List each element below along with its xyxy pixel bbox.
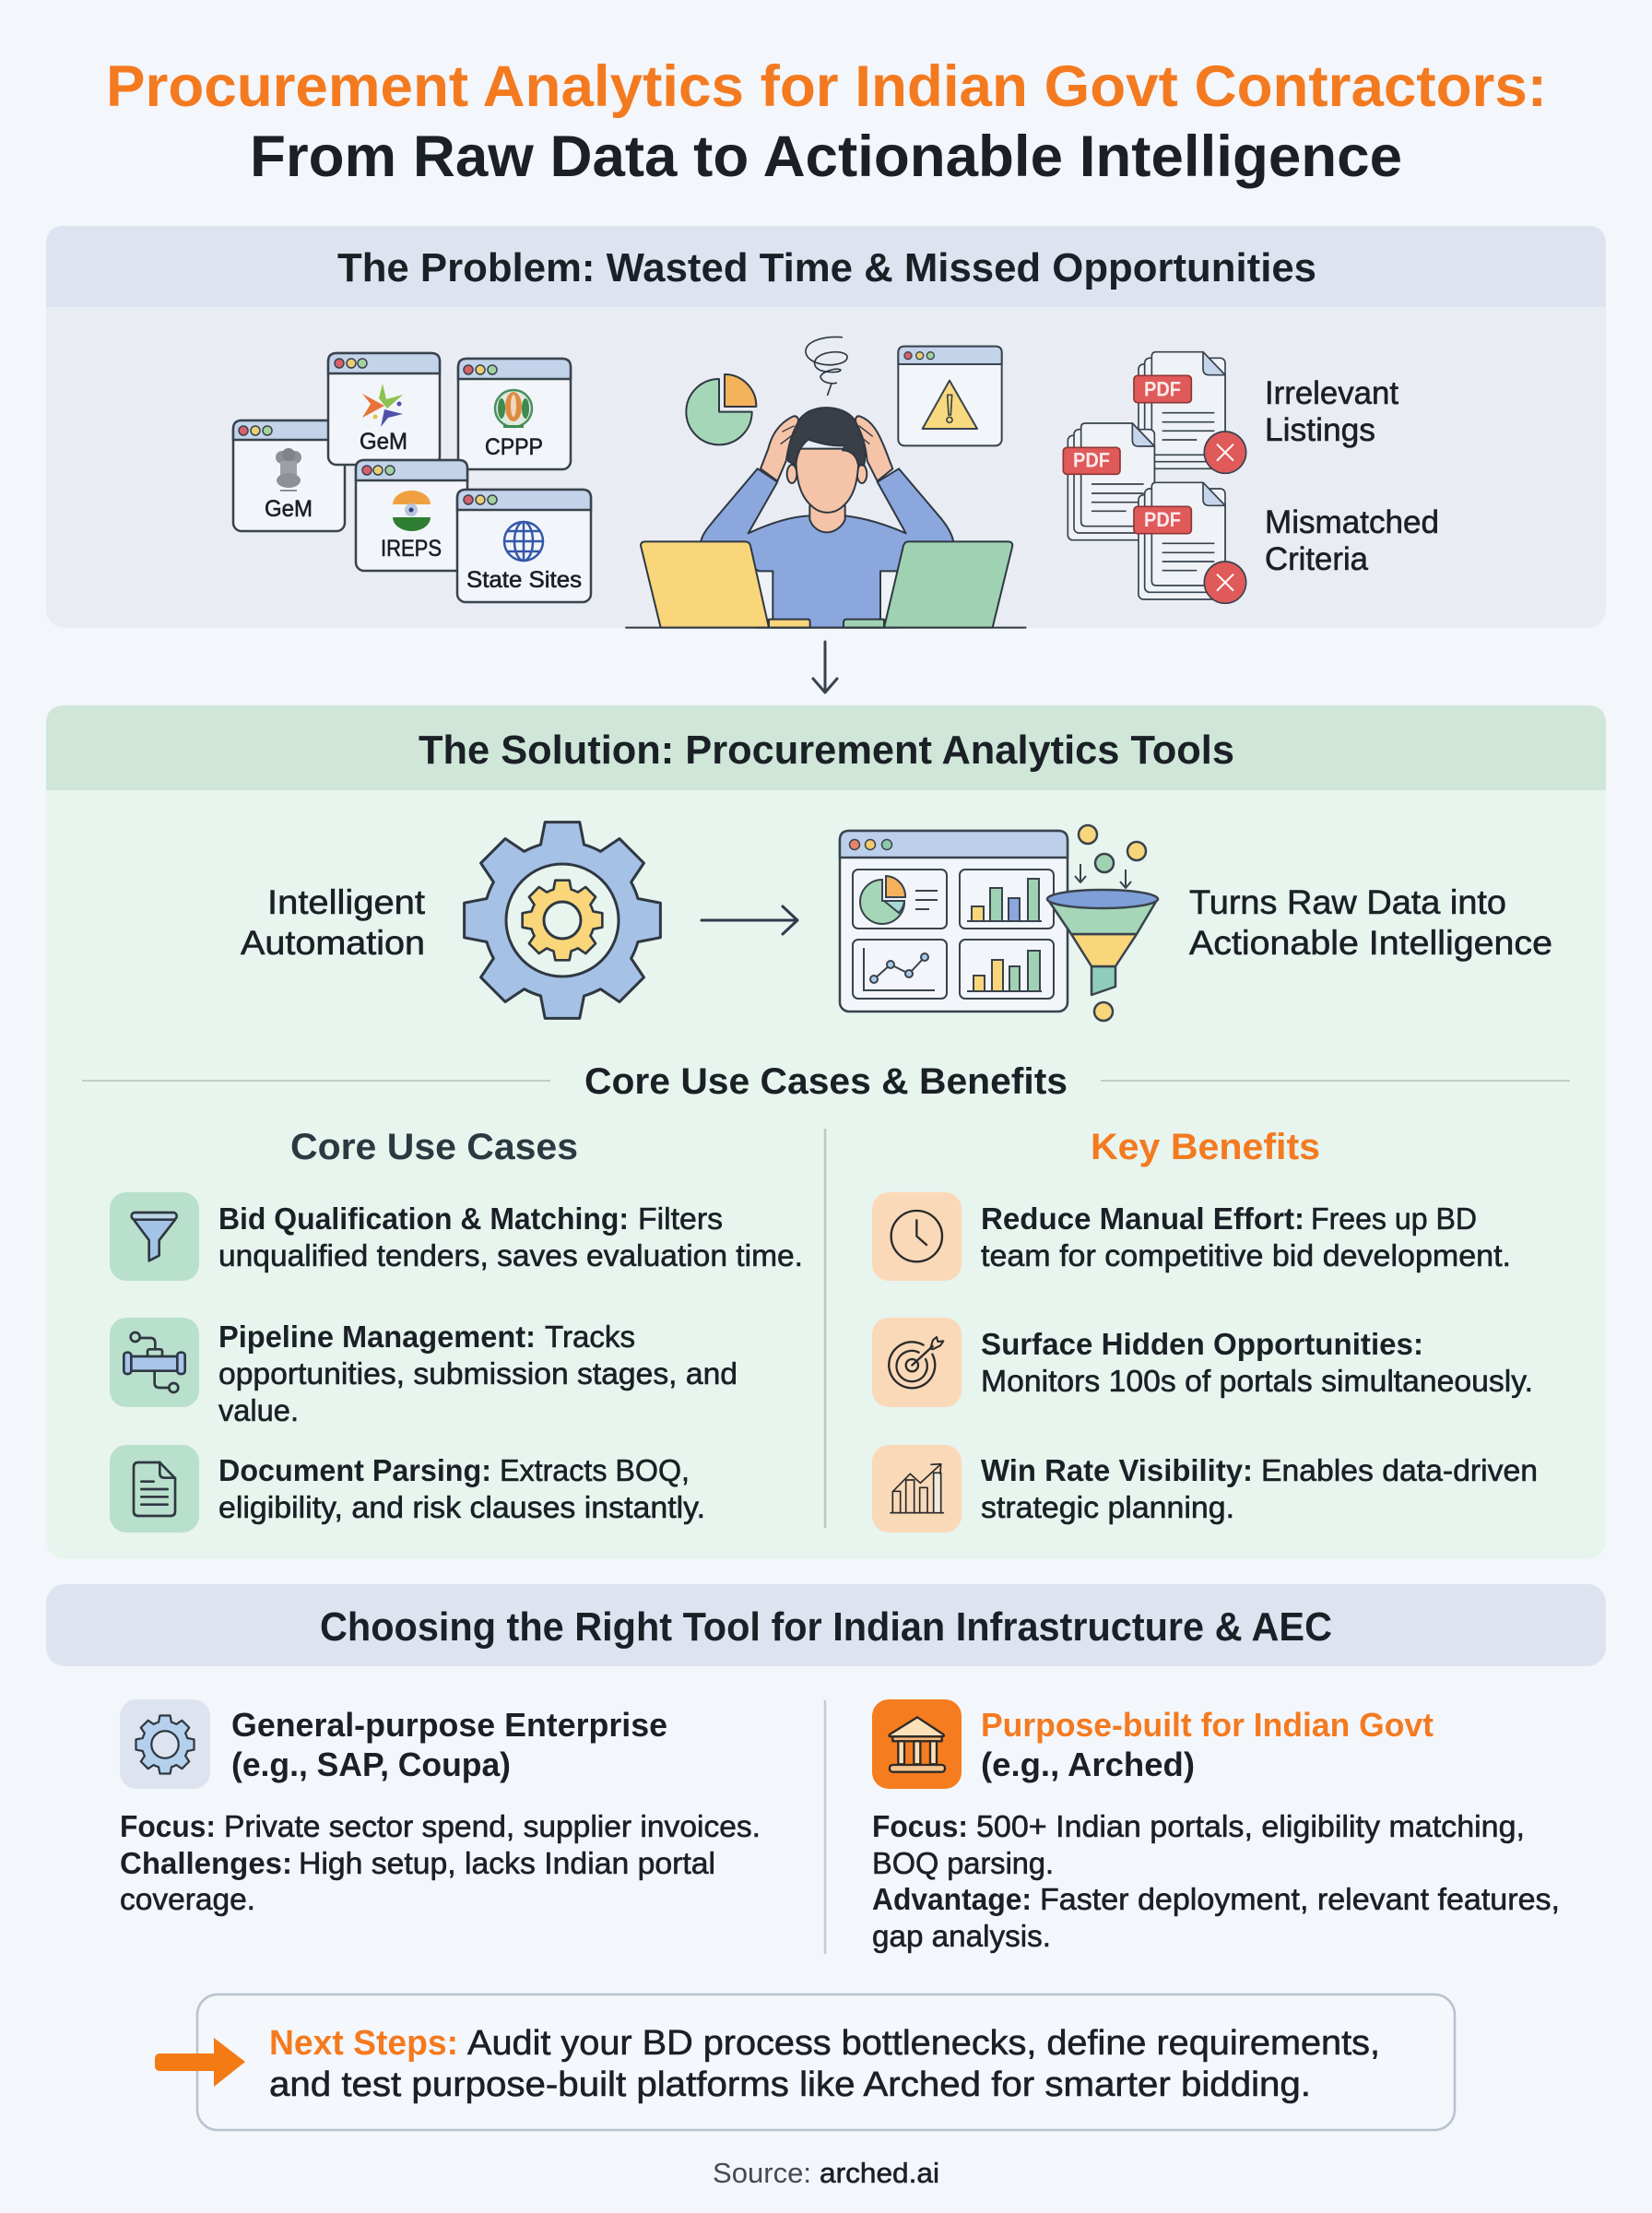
- benefit: surface hidden opportunities: Monitors 100s of portals simultaneously.: [981, 1364, 1533, 1398]
- callout: next steps: Next Steps:: [269, 2024, 458, 2063]
- icon: clock: [891, 1211, 942, 1261]
- label: mismatched criteria: Criteria: [1265, 541, 1369, 577]
- label: irrelevant listings: Irrelevant: [1265, 375, 1398, 411]
- use case: bid qualification: [110, 1192, 803, 1281]
- callout: next steps: [155, 1994, 1455, 2130]
- use case: document parsing: Document Parsing:: [218, 1453, 491, 1487]
- icon: growth chart: [891, 1464, 943, 1513]
- use case: pipeline management: Tracks: [545, 1320, 635, 1354]
- icon: pie chart: [686, 374, 756, 444]
- comparison: purpose-built: [872, 1699, 1560, 1953]
- use case: pipeline management: value.: [218, 1393, 299, 1427]
- dashboard tile: line chart: [853, 940, 947, 999]
- benefit: reduce manual effort: team for competitive bid development.: [981, 1238, 1511, 1272]
- callout: next steps: and test purpose-built platforms like Arched for smarter bidding.: [269, 2065, 1311, 2104]
- arrow: automation to dashboard: [702, 906, 797, 934]
- icon: automation gears: [465, 822, 660, 1018]
- window: State Sites: State Sites: [466, 567, 582, 593]
- comparison: purpose-built: gap analysis.: [872, 1919, 1051, 1953]
- desk line: [625, 625, 1026, 631]
- window: IREPS: [356, 460, 467, 571]
- window: GeM star: GeM: [360, 429, 407, 455]
- comparison: general-purpose enterprise: [120, 1699, 761, 1916]
- dashboard tile: bar chart: [960, 870, 1054, 929]
- use case: bid qualification: unqualified tenders, saves evaluation time.: [218, 1238, 803, 1272]
- icon: warning window: [898, 347, 1002, 445]
- comparison: general-purpose enterprise: Challenges:: [120, 1846, 292, 1880]
- comparison: general-purpose enterprise: Private sector spend, supplier invoices.: [224, 1809, 761, 1843]
- title: Procurement Analytics for Indian Govt Contractors:: [106, 54, 1547, 119]
- comparison: purpose-built: 500+ Indian portals, eligibility matching,: [976, 1809, 1525, 1843]
- use case: pipeline management: opportunities, submission stages, and: [218, 1356, 738, 1391]
- window: GeM emblem: [233, 420, 345, 531]
- source line: arched.ai: [820, 2157, 939, 2189]
- comparison: general-purpose enterprise: coverage.: [120, 1882, 255, 1916]
- subheading: core use cases and benefits: Core Use Cases & Benefits: [584, 1061, 1068, 1102]
- comparison: purpose-built: BOQ parsing.: [872, 1846, 1054, 1880]
- icon: funnel: [132, 1213, 177, 1260]
- use case: document parsing: eligibility, and risk clauses instantly.: [218, 1490, 705, 1524]
- label: intelligent automation: Automation: [241, 924, 425, 962]
- label: irrelevant listings: [1265, 375, 1398, 448]
- benefit: win rate visibility: [872, 1445, 1538, 1533]
- problem header bar: [46, 226, 1606, 307]
- label: turns raw data: [1189, 883, 1552, 962]
- use case: bid qualification: Bid Qualification & Matching:: [218, 1201, 629, 1236]
- comparison: general-purpose enterprise: High setup, lacks Indian portal: [299, 1846, 715, 1880]
- arrow: problem to solution: [813, 642, 837, 692]
- panel: the problem: [46, 226, 1606, 628]
- person: [701, 408, 953, 628]
- label: intelligent automation: [241, 883, 426, 962]
- stack: middle PDF: [1063, 423, 1154, 540]
- comparison: general-purpose enterprise: General-purpose Enterprise: [231, 1706, 667, 1744]
- title: From Raw Data to Actionable Intelligence: [250, 124, 1402, 189]
- benefit: win rate visibility: Win Rate Visibility:: [981, 1453, 1253, 1487]
- use case: pipeline management: Pipeline Management:: [218, 1320, 536, 1354]
- benefit: reduce manual effort: [872, 1192, 1511, 1281]
- illustration: overwhelmed person at laptops: [625, 337, 1026, 628]
- icon: confusion spiral: [806, 337, 847, 395]
- icon: pipeline: [124, 1332, 185, 1392]
- laptop: yellow: [641, 541, 810, 628]
- use case: document parsing: Extracts BOQ,: [500, 1453, 690, 1487]
- icon: gear: [136, 1715, 195, 1774]
- column heading: key benefits: Key Benefits: [1091, 1127, 1320, 1167]
- benefit: surface hidden opportunities: [872, 1318, 1533, 1407]
- icon: data funnel: [1047, 825, 1158, 1021]
- comparison: purpose-built: Advantage:: [872, 1882, 1032, 1916]
- window: CPPP: CPPP: [485, 434, 543, 460]
- dashboard tile: second bar chart: [960, 940, 1054, 999]
- section bar: choosing the right tool: [46, 1584, 1606, 1666]
- callout: next steps: Audit your BD process bottlenecks, define requirements,: [467, 2024, 1380, 2063]
- column heading: core use cases: Core Use Cases: [290, 1127, 578, 1167]
- icon: target: [889, 1337, 943, 1388]
- icon: analytics dashboard: [840, 831, 1068, 1012]
- label: mismatched criteria: [1265, 504, 1439, 577]
- label: turns raw data: Actionable Intelligence: [1189, 924, 1552, 962]
- laptop: green: [844, 541, 1012, 628]
- stack: top PDF: [1134, 352, 1246, 473]
- use case: pipeline management: [110, 1318, 738, 1427]
- panel: the solution: [46, 705, 1606, 1559]
- window: GeM star: [328, 353, 440, 465]
- solution header bar: [46, 705, 1606, 790]
- icon: document: [134, 1462, 175, 1516]
- label: intelligent automation: Intelligent: [267, 883, 426, 921]
- benefit: surface hidden opportunities: Surface Hidden Opportunities:: [981, 1327, 1423, 1361]
- benefit: win rate visibility: strategic planning.: [981, 1490, 1234, 1524]
- solution heading: The Solution: Procurement Analytics Tools: [419, 728, 1234, 773]
- comparison: purpose-built: Faster deployment, relevant features,: [1040, 1882, 1560, 1916]
- window: CPPP: [458, 359, 571, 469]
- problem heading: The Problem: Wasted Time & Missed Opportunities: [337, 245, 1316, 290]
- comparison: general-purpose enterprise: (e.g., SAP, Coupa): [231, 1746, 511, 1783]
- label: turns raw data: Turns Raw Data into: [1189, 883, 1506, 921]
- dashboard tile: pie chart: [853, 870, 947, 929]
- stack: top PDF: PDF: [1144, 377, 1181, 400]
- icon: government building: [890, 1717, 945, 1772]
- benefit: win rate visibility: Enables data-driven: [1261, 1453, 1538, 1487]
- window: State Sites: [457, 490, 591, 602]
- comparison: general-purpose enterprise: Focus:: [120, 1809, 216, 1843]
- comparison: purpose-built: (e.g., Arched): [981, 1746, 1195, 1783]
- stack: middle PDF: PDF: [1073, 449, 1110, 472]
- section bar: choosing the right tool: Choosing the Right Tool for Indian Infrastructure & AEC: [320, 1604, 1332, 1650]
- label: irrelevant listings: Listings: [1265, 412, 1375, 448]
- window: IREPS: IREPS: [381, 536, 442, 562]
- use case: document parsing: [110, 1445, 705, 1533]
- stack: bottom PDF: [1134, 482, 1246, 603]
- benefit: reduce manual effort: Frees up BD: [1311, 1201, 1477, 1236]
- label: mismatched criteria: Mismatched: [1265, 504, 1439, 540]
- illustration: PDF document stacks: [1063, 352, 1246, 603]
- title: [106, 54, 1547, 189]
- benefit: reduce manual effort: Reduce Manual Effort:: [981, 1201, 1304, 1236]
- window: GeM emblem: GeM: [265, 496, 313, 522]
- stack: bottom PDF: PDF: [1144, 508, 1181, 531]
- comparison: purpose-built: Focus:: [872, 1809, 968, 1843]
- comparison: purpose-built: Purpose-built for Indian Govt: [981, 1706, 1434, 1744]
- portal windows cluster: [233, 353, 591, 602]
- source line: Source:: [713, 2157, 811, 2189]
- arrow: next steps: [155, 2038, 245, 2087]
- use case: bid qualification: Filters: [638, 1201, 723, 1236]
